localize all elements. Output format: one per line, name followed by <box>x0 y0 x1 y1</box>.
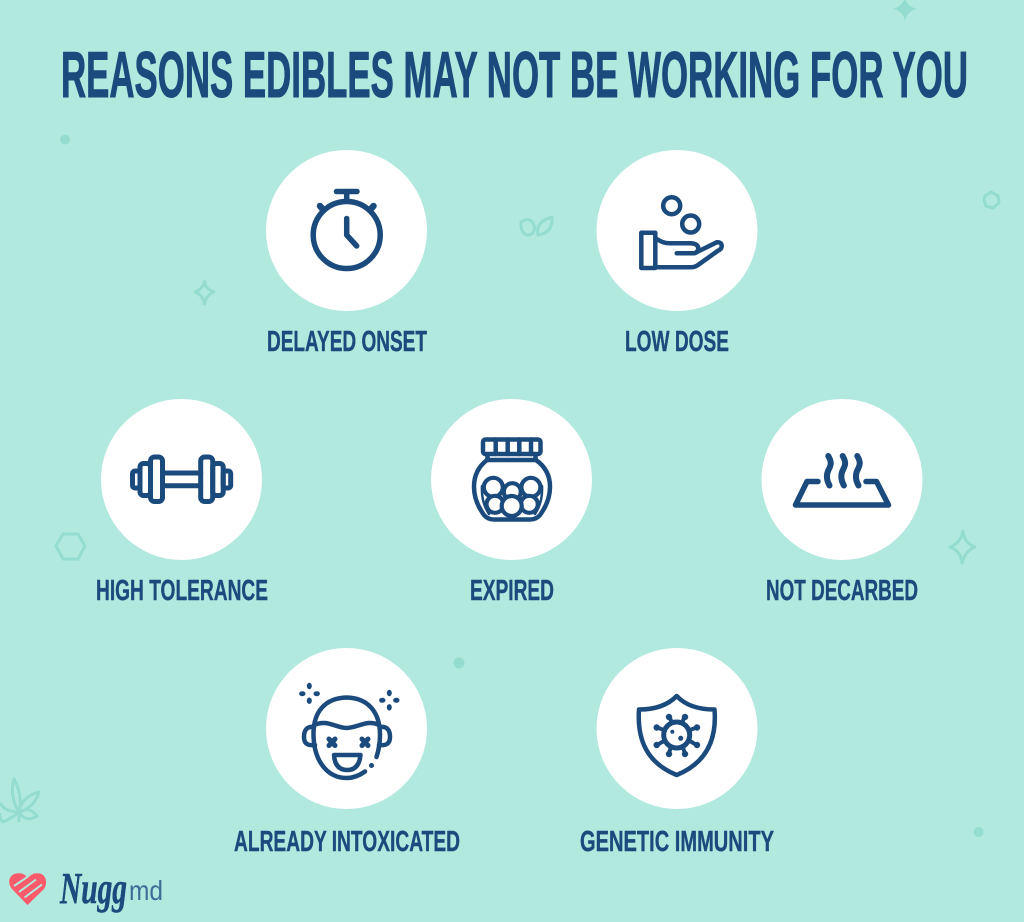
label: LOW DOSE <box>625 326 729 358</box>
label: ALREADY INTOXICATED <box>234 826 460 858</box>
icon: shield with virus <box>639 696 715 775</box>
icon: steaming tray <box>796 456 888 505</box>
item: delayed onset <box>266 150 427 358</box>
item: high tolerance <box>96 399 268 607</box>
label: DELAYED ONSET <box>267 326 427 358</box>
logo: Nugg md <box>9 864 163 913</box>
item: genetic immunity <box>580 648 774 858</box>
icon: hand with coins <box>641 197 722 268</box>
item: expired <box>431 399 592 607</box>
icon: dizzy face <box>299 683 399 778</box>
icon: dumbbell <box>132 457 231 502</box>
label: EXPIRED <box>470 575 554 607</box>
logo: Nugg md: md <box>129 875 163 906</box>
wordmark: Nugg <box>59 864 127 913</box>
icon: striped heart <box>9 873 46 905</box>
icon: jar of gummies <box>474 440 550 520</box>
label: NOT DECARBED <box>766 575 918 607</box>
label: HIGH TOLERANCE <box>96 575 268 607</box>
item: already intoxicated <box>234 648 460 858</box>
icon: stopwatch <box>313 192 380 268</box>
item: not decarbed <box>762 399 922 607</box>
label: GENETIC IMMUNITY <box>580 826 774 858</box>
item: low dose <box>596 150 758 358</box>
